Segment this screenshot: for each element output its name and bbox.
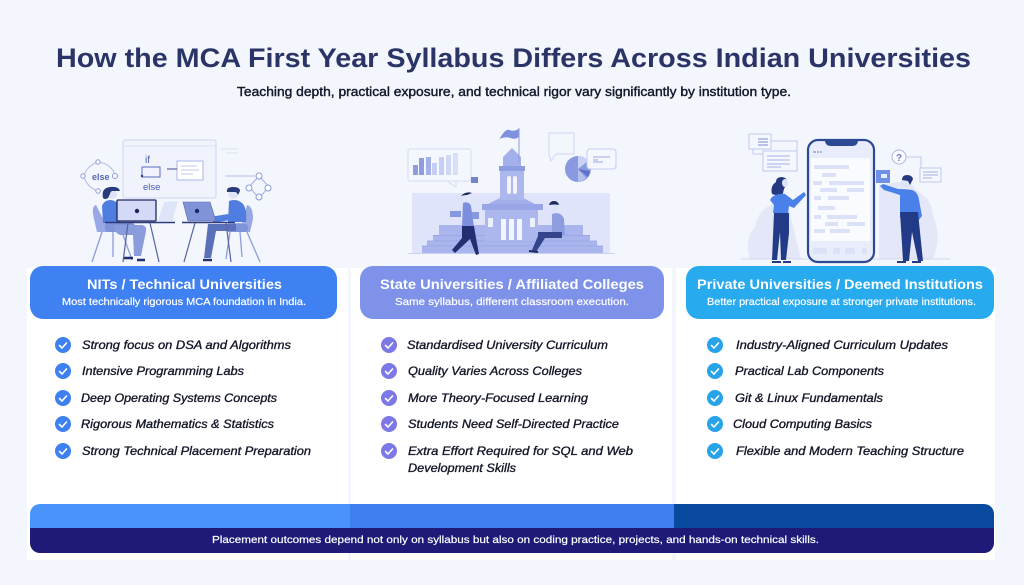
list: State features: More Theory-Focused Learning: [408, 391, 588, 405]
else node loop: else: [92, 172, 110, 182]
subtitle: Teaching depth, practical exposure, and technical rigor vary significantly by institution type.: [237, 84, 791, 99]
bar chart bubble: [408, 149, 471, 187]
seated student: [529, 201, 565, 252]
steps: [422, 225, 603, 253]
illustration: university building with students: [408, 128, 616, 255]
list: State features: Development Skills: [408, 461, 516, 475]
panel: NITs / Technical Universities: [27, 266, 348, 560]
panel: State Universities / Affiliated Colleges: [351, 266, 672, 560]
list: State features: [381, 337, 633, 475]
list: NITs features: Deep Operating Systems Concepts: [81, 391, 277, 405]
left student: [92, 187, 178, 262]
list: State features: Students Need Self-Directed Practice: [408, 417, 619, 431]
illustration: students coding at laptops: [81, 140, 271, 262]
header: Private Universities: Private Universities / Deemed Institutions: [697, 277, 983, 292]
list: State features: Quality Varies Across Colleges: [408, 364, 582, 378]
header: Private Universities: [686, 266, 994, 319]
code window: if: [145, 155, 150, 166]
list: NITs features: Strong Technical Placement Preparation: [82, 444, 311, 458]
phone: [808, 140, 874, 262]
list: NITs features: [55, 337, 311, 459]
list: Private features: Industry-Aligned Curriculum Updates: [736, 338, 948, 352]
list: Private features: Flexible and Modern Teaching Structure: [736, 444, 964, 458]
walking student: [450, 192, 479, 255]
header: NITs: Most technically rigorous MCA foundation in India.: [62, 296, 306, 308]
footer text: Placement outcomes depend not only on syllabus but also on coding practice, projects, and hands-on technical skills.: [212, 534, 819, 546]
header: State Universities: [360, 266, 664, 319]
pie chart and bubbles: [549, 133, 616, 182]
header: Private Universities: Better practical exposure at stronger private institutions.: [707, 296, 976, 308]
man: [876, 170, 923, 262]
list: Private features: Git & Linux Fundamentals: [735, 391, 883, 405]
graph nodes: [221, 149, 271, 200]
list: Private features: Cloud Computing Basics: [733, 417, 872, 431]
university building: [482, 128, 543, 241]
footer banner: [30, 504, 994, 553]
right student: [182, 187, 260, 262]
list: Private features: Practical Lab Components: [735, 364, 884, 378]
list: NITs features: Intensive Programming Labs: [82, 364, 244, 378]
list: State features: Standardised University Curriculum: [407, 338, 608, 352]
code window: else: [143, 182, 160, 193]
panel: Private Universities / Deemed Institutions: [676, 266, 995, 560]
header: NITs: [30, 266, 337, 319]
illustration: people with mobile app: [741, 134, 950, 262]
list: State features: Extra Effort Required for SQL and Web: [408, 444, 633, 458]
list: NITs features: Strong focus on DSA and Algorithms: [82, 338, 291, 352]
question bubble: [892, 150, 941, 182]
header: State Universities: State Universities / Affiliated Colleges: [380, 277, 644, 292]
header: NITs: NITs / Technical Universities: [87, 277, 282, 292]
woman: [770, 177, 806, 262]
header: State Universities: Same syllabus, different classroom execution.: [395, 296, 629, 308]
list: Private features: [707, 337, 964, 459]
code window: [123, 140, 216, 198]
else node loop: [81, 160, 118, 193]
chat cards: [749, 134, 797, 171]
question bubble: ?: [896, 153, 902, 164]
title: How the MCA First Year Syllabus Differs Across Indian Universities: [56, 43, 971, 73]
list: NITs features: Rigorous Mathematics & Statistics: [81, 417, 274, 431]
